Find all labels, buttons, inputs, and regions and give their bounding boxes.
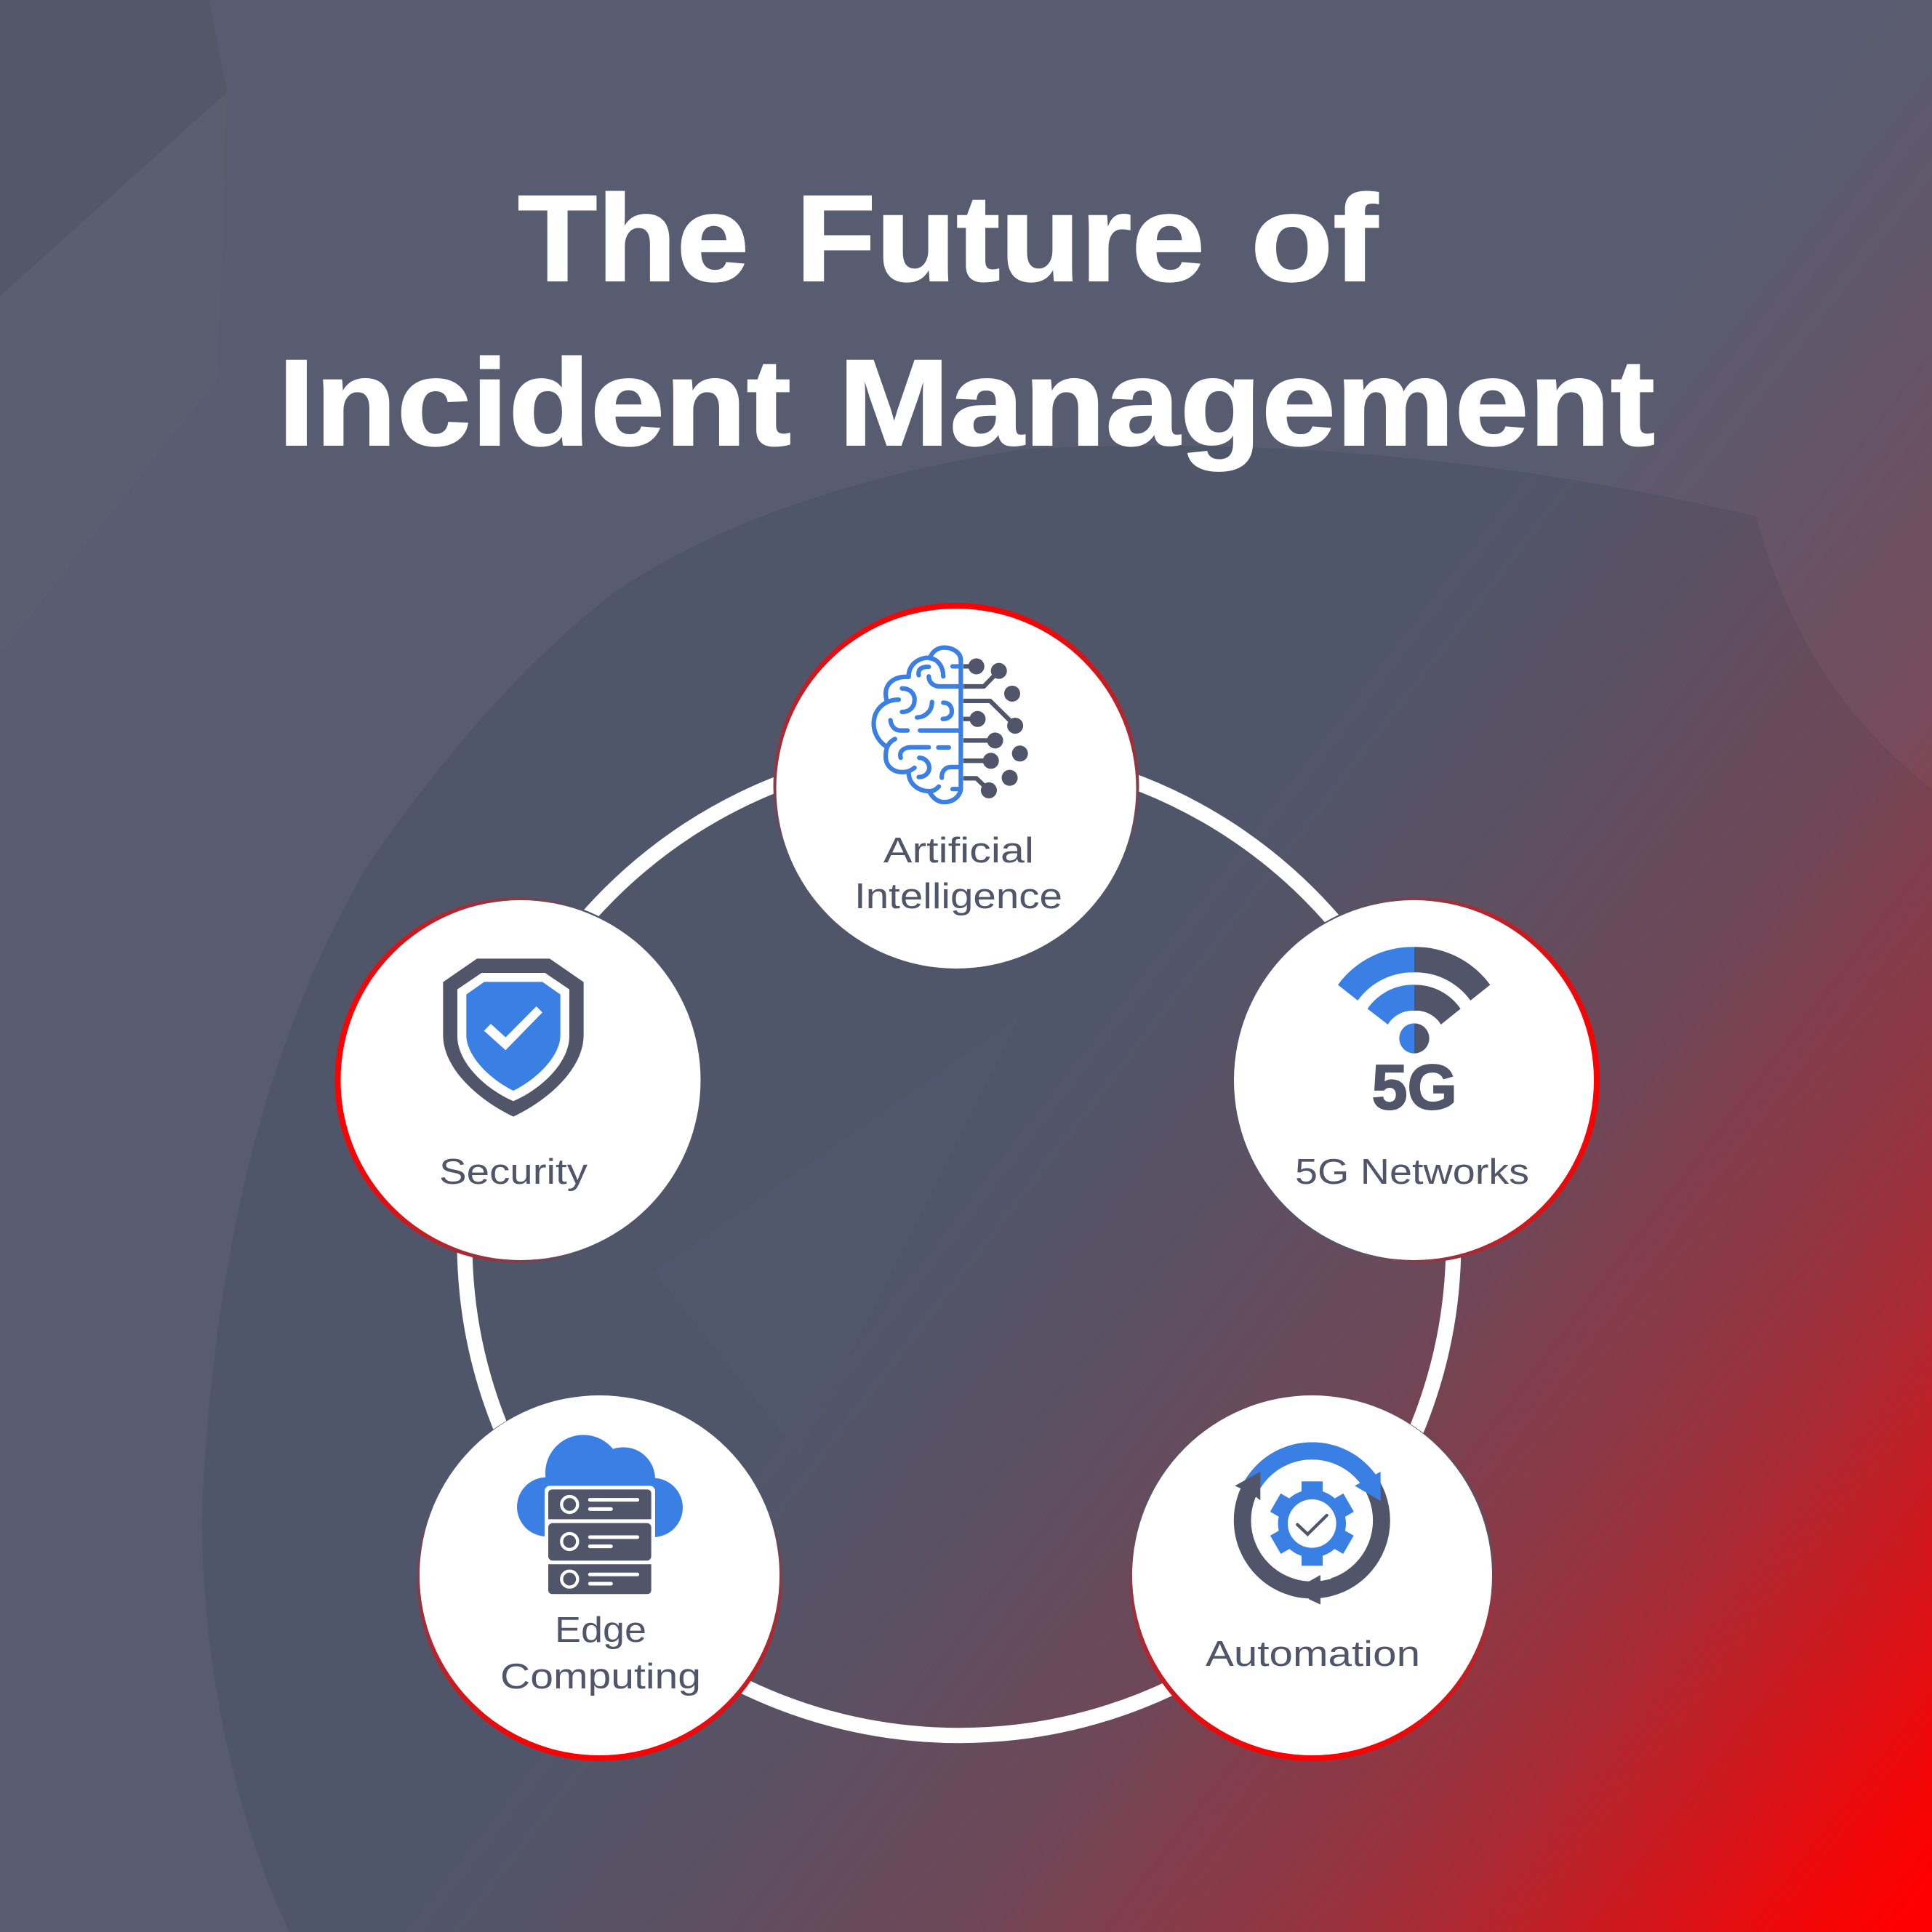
label: Edge Computing: Computing — [500, 1657, 701, 1696]
label: Edge Computing: Edge — [555, 1611, 646, 1650]
title: Management — [838, 334, 1655, 471]
icon: gear with cycle arrows — [1235, 1442, 1382, 1605]
label: 5G Networks: 5G Networks — [1295, 1153, 1529, 1192]
node: Automation — [1129, 1395, 1495, 1761]
title: Future — [795, 169, 1205, 307]
connecting ring — [465, 750, 1454, 1736]
node: Security — [334, 897, 701, 1263]
label: Edge Computing — [500, 1611, 701, 1696]
icon: shield — [443, 958, 584, 1117]
node: Artificial Intelligence — [774, 603, 1139, 969]
node: Edge Computing — [417, 1395, 782, 1761]
icon: 5G wifi — [1338, 947, 1490, 1123]
title — [278, 169, 1655, 471]
label: Artificial Intelligence: Intelligence — [854, 877, 1062, 916]
label: Artificial Intelligence — [854, 831, 1062, 916]
label: Artificial Intelligence: Artificial — [883, 831, 1034, 870]
title: The — [518, 169, 749, 307]
label: Security: Security — [439, 1153, 588, 1192]
icon: 5G wifi: 5G — [1372, 1051, 1457, 1123]
title: of — [1251, 169, 1379, 307]
title: Incident — [278, 334, 791, 471]
icon: brain circuit — [874, 648, 1028, 802]
node: 5G Networks — [1234, 897, 1600, 1263]
icon: cloud server — [517, 1435, 683, 1596]
label: Automation: Automation — [1206, 1635, 1420, 1674]
